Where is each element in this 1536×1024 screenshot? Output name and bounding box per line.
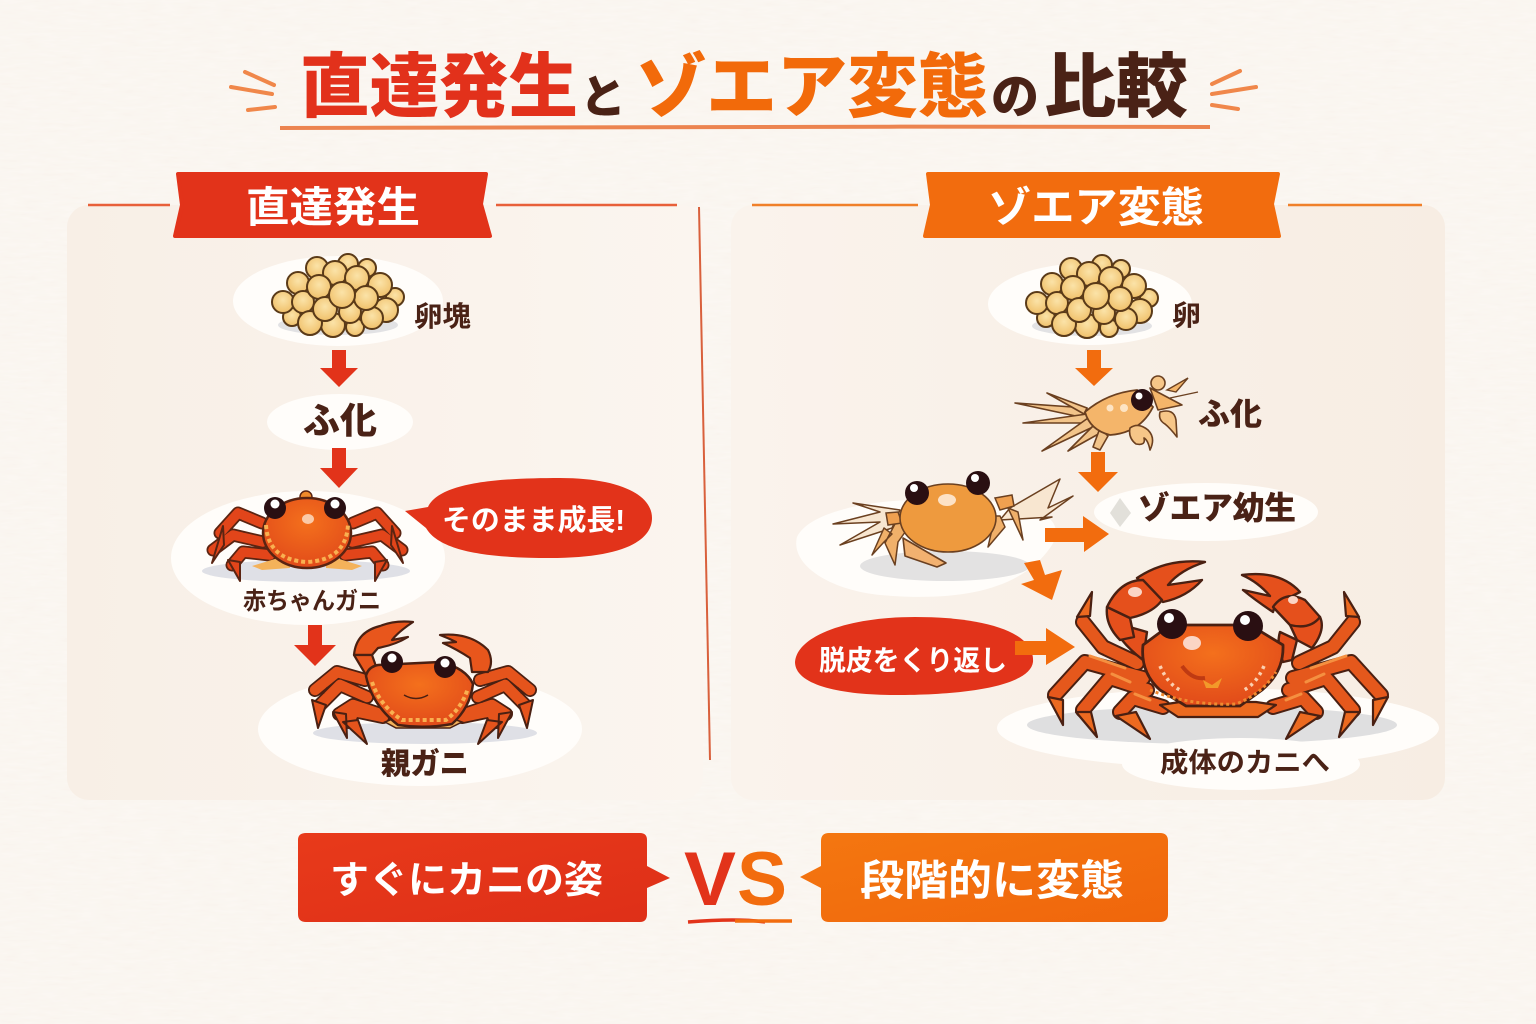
heading: zoea metamorphosis: ゾエア変態 <box>988 184 1204 231</box>
arrow <box>1045 516 1109 552</box>
right egg stage <box>988 255 1201 345</box>
label: to adult crab <box>1122 738 1360 790</box>
icon: baby crab <box>212 491 403 581</box>
title: の <box>991 71 1039 124</box>
zoea crab stage <box>796 471 1073 597</box>
baby crab stage <box>171 491 445 625</box>
label: egg mass: 卵塊 <box>414 301 471 332</box>
claw: left <box>1107 561 1205 660</box>
title: ゾエア変態 <box>636 48 988 126</box>
arrow <box>1078 452 1118 492</box>
icon: sparkle <box>1110 498 1131 527</box>
heading: direct development: 直達発生 <box>246 184 420 231</box>
shadow <box>313 722 537 744</box>
icon: egg cluster <box>1026 255 1158 338</box>
zoea larva label <box>1094 483 1318 541</box>
parent crab stage <box>258 622 582 786</box>
claw: right <box>1242 574 1322 662</box>
zoea larva label: ゾエア幼生 <box>1138 490 1296 526</box>
label: parent crab: 親ガニ <box>381 748 469 781</box>
arrow <box>320 448 358 488</box>
arrow <box>1021 560 1062 600</box>
panel: direct development background <box>67 205 703 800</box>
label: hatching: ふ化 <box>1198 397 1262 432</box>
title: と <box>580 71 626 123</box>
arrow <box>1015 628 1075 665</box>
adult crab stage <box>997 561 1439 790</box>
shadow <box>860 551 1030 581</box>
arrow <box>320 350 358 387</box>
VS mark <box>684 837 792 922</box>
arrow <box>1075 350 1113 386</box>
arrow <box>294 625 336 666</box>
heading: direct development <box>88 174 677 236</box>
icon: adult crab <box>1048 561 1388 739</box>
heading: zoea metamorphosis <box>752 174 1422 236</box>
title <box>300 48 1188 126</box>
callout: repeated molting: 脱皮をくり返し <box>819 645 1007 676</box>
hatching pill <box>267 394 413 450</box>
callout: repeated molting <box>795 617 1033 695</box>
icon: zoea larva <box>1015 376 1198 451</box>
summary box: direct development <box>298 833 670 922</box>
hatching pill: ふ化 <box>303 400 377 441</box>
summary box: direct development: すぐにカニの姿 <box>330 860 603 902</box>
callout: grows as is: そのまま成長! <box>442 504 625 537</box>
panel: zoea metamorphosis background <box>731 205 1445 800</box>
icon: zoea-stage crab <box>833 471 1073 567</box>
VS mark: V <box>684 837 736 922</box>
label: to adult crab: 成体のカニへ <box>1160 748 1330 778</box>
icon: egg cluster <box>272 254 404 337</box>
label: baby crab: 赤ちゃんガニ <box>243 588 381 615</box>
shadow <box>1027 706 1397 744</box>
VS mark: S <box>737 837 787 922</box>
divider <box>699 207 710 760</box>
summary box: metamorphosis <box>800 833 1168 922</box>
title: 比較 <box>1044 48 1188 126</box>
callout: grows as is <box>405 478 652 558</box>
title underline <box>280 127 1210 128</box>
left egg mass with label <box>233 254 471 346</box>
title: 直達発生 <box>300 48 578 126</box>
larva with hatch label <box>1015 376 1262 451</box>
title accent strokes <box>231 71 1256 110</box>
label: egg: 卵 <box>1172 300 1201 331</box>
summary box: metamorphosis: 段階的に変態 <box>860 857 1124 904</box>
icon: parent crab <box>312 622 533 744</box>
shadow <box>202 560 410 582</box>
